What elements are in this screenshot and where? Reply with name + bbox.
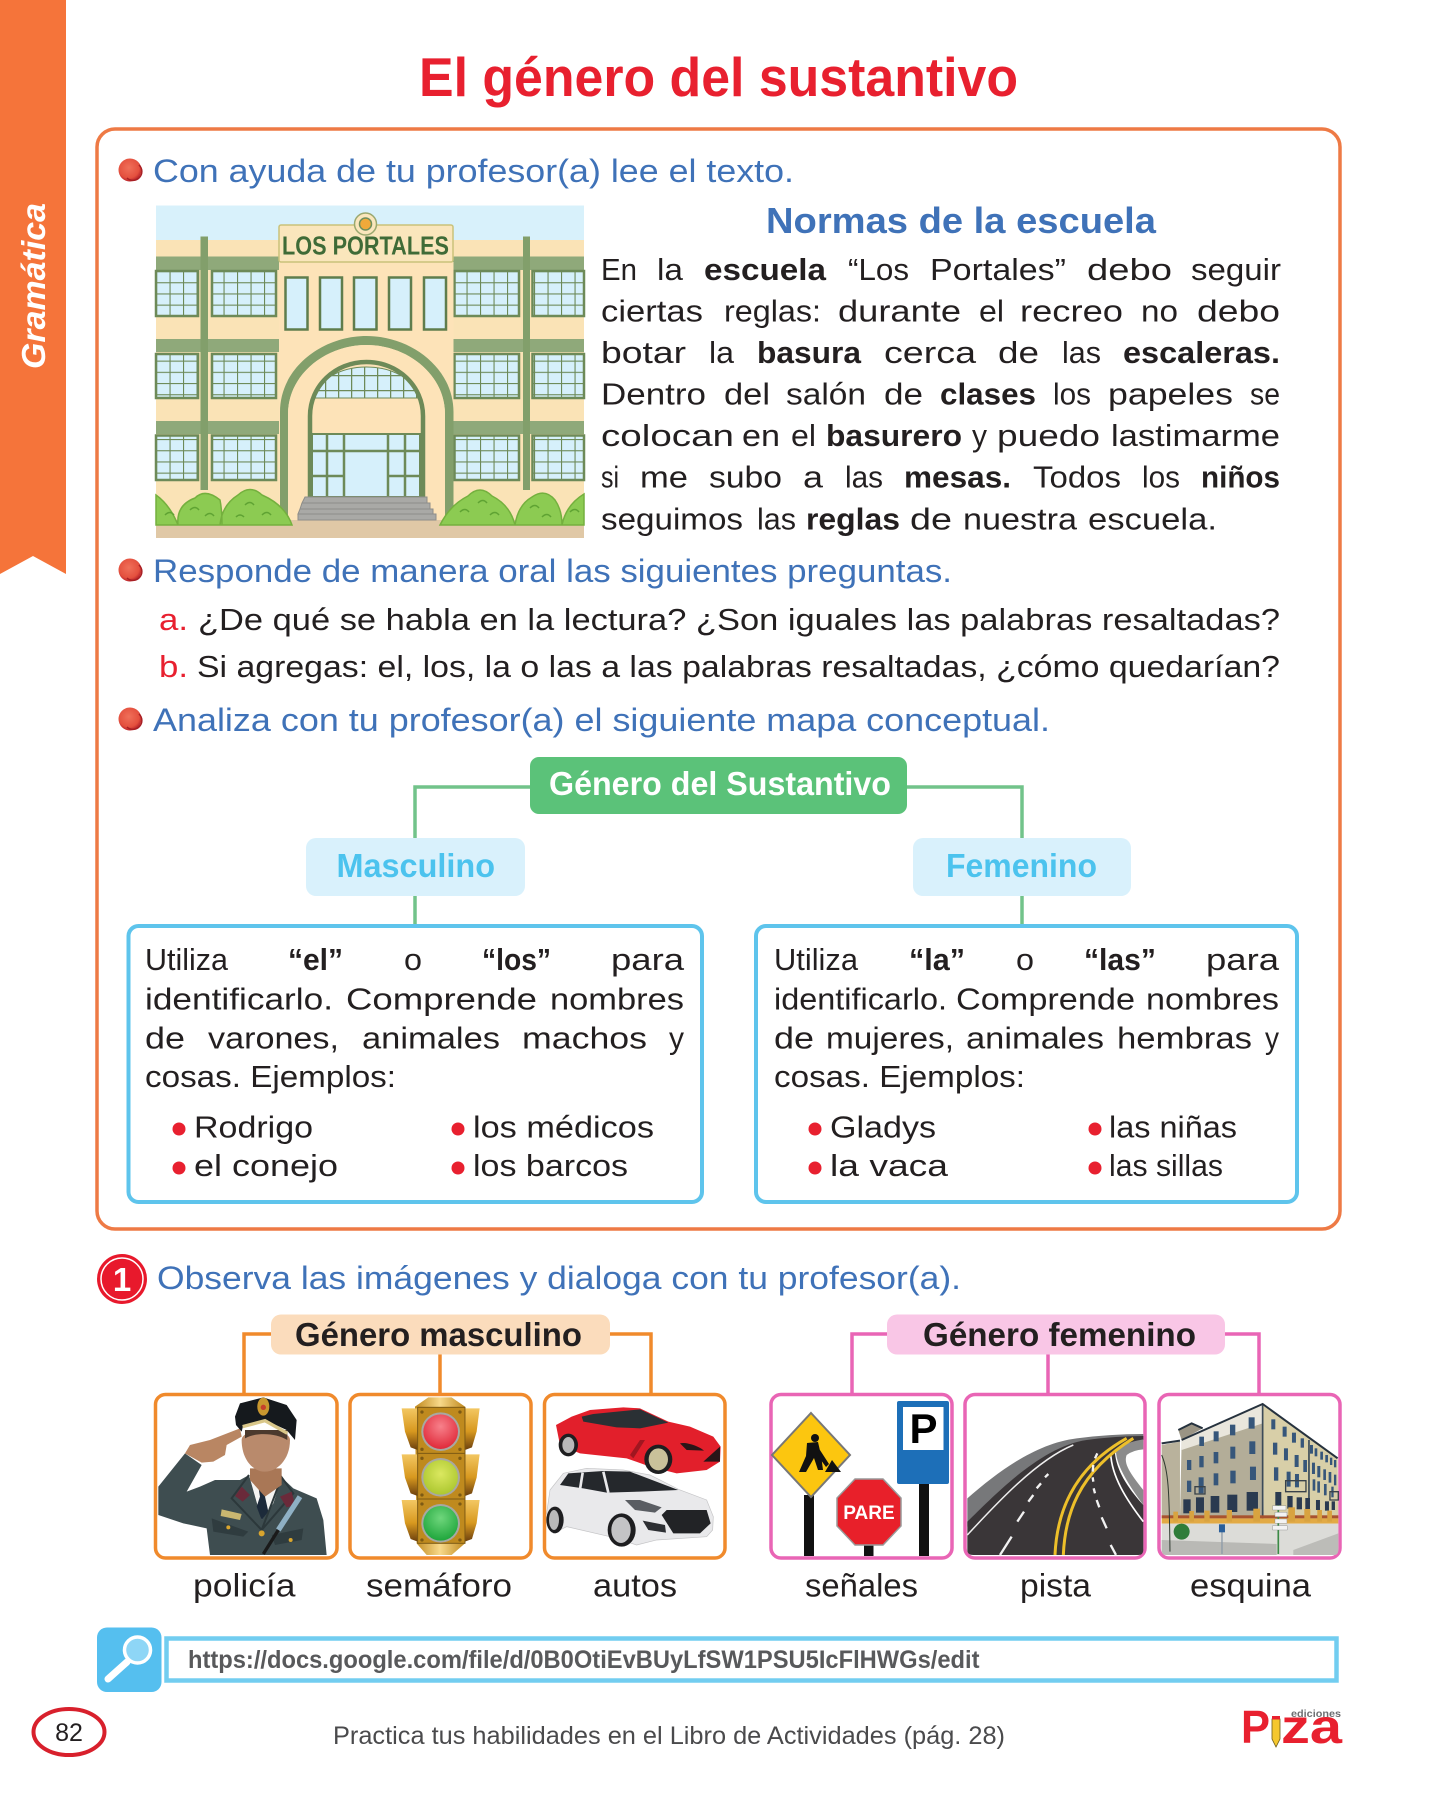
- feminine box: mujeres,: [826, 1020, 954, 1056]
- masculine box: varones,: [208, 1020, 339, 1056]
- feminine box: Comprende: [956, 982, 1135, 1016]
- feminine box: [756, 926, 1297, 1202]
- instruction 3: Analiza con tu profesor(a) el siguiente mapa conceptual.: [153, 702, 1050, 738]
- card: autos: [544, 1394, 725, 1558]
- reading text: Dentro: [601, 376, 706, 411]
- reading text: “Los: [848, 252, 909, 287]
- masculine box: cosas. Ejemplos:: [145, 1059, 396, 1094]
- concept: masculino: Masculino: [336, 847, 495, 884]
- feminine box: cosas. Ejemplos:: [774, 1059, 1025, 1094]
- feminine examples: las niñas: [1109, 1110, 1237, 1145]
- reading text: seguimos: [601, 501, 743, 536]
- reading text: clases: [940, 376, 1036, 411]
- logo: Piza ediciones: P: [1241, 1701, 1270, 1753]
- reading text: y: [972, 418, 987, 453]
- exercise instruction: Observa las imágenes y dialoga con tu profesor(a).: [157, 1260, 961, 1296]
- heading: género masculino: Género masculino: [295, 1316, 582, 1353]
- masculine box: identificarlo.: [145, 982, 333, 1016]
- card: señales: [771, 1394, 952, 1558]
- sidebar ribbon: [0, 0, 66, 574]
- group: género femenino: [771, 1314, 1340, 1604]
- masculine box: machos: [522, 1020, 647, 1056]
- masculine box: y: [669, 1020, 684, 1056]
- masculine box: “los”: [482, 942, 551, 977]
- reading text: del: [724, 376, 770, 411]
- sidebar label: Gramática: [15, 203, 52, 369]
- group: género masculino: [156, 1314, 725, 1604]
- label: semáforo: semáforo: [366, 1568, 512, 1604]
- bullet 1: [118, 158, 142, 182]
- logo: Piza ediciones: za: [1281, 1701, 1342, 1754]
- reading text: escuela: [704, 252, 827, 287]
- feminine box: “la”: [909, 942, 965, 977]
- feminine box: nombres: [1146, 982, 1279, 1016]
- reading text: el: [979, 293, 1004, 328]
- bullet 3: [118, 708, 142, 730]
- reading text: de: [910, 501, 952, 536]
- logo: Piza ediciones: [1241, 1701, 1342, 1754]
- reading text: puedo: [997, 418, 1100, 453]
- label: autos: autos: [593, 1568, 677, 1604]
- feminine box: y: [1265, 1020, 1279, 1056]
- masculine box: de: [145, 1020, 185, 1056]
- reading text: Portales”: [930, 252, 1066, 287]
- card: policía: [156, 1394, 337, 1558]
- reading text: en: [742, 418, 780, 453]
- reading text: basurero: [826, 418, 962, 453]
- masculine examples: el conejo: [194, 1148, 338, 1183]
- question a: a.: [159, 602, 188, 637]
- instruction 1: Con ayuda de tu profesor(a) lee el texto.: [153, 153, 794, 189]
- label: señales: señales: [805, 1568, 918, 1604]
- school illustration: LOS PORTALES: [282, 230, 449, 260]
- sign: obras: [772, 1413, 850, 1556]
- reading text: subo: [709, 459, 782, 494]
- concept: femenino: Femenino: [946, 847, 1097, 884]
- reading text: se: [1250, 376, 1280, 411]
- sign: pare: PARE: [843, 1503, 895, 1524]
- masculine box: nombres: [550, 982, 684, 1016]
- concept root: [530, 757, 907, 814]
- reading text: basura: [757, 335, 862, 370]
- white car: [546, 1468, 713, 1547]
- feminine box: identificarlo.: [774, 982, 947, 1016]
- instruction 2: Responde de manera oral las siguientes preguntas.: [153, 553, 952, 589]
- reading text: debo: [1087, 252, 1172, 287]
- masculine box: para: [611, 942, 685, 977]
- sign board: [279, 225, 453, 262]
- title: El género del sustantivo: [419, 46, 1018, 108]
- panel: main reading: [97, 129, 1340, 1229]
- masculine examples: Rodrigo: [194, 1110, 313, 1145]
- reading text: de: [998, 335, 1039, 370]
- reading text: botar: [601, 335, 686, 370]
- reading text: la: [657, 252, 684, 287]
- reading text: las: [757, 501, 796, 536]
- reading text: escuela.: [1088, 501, 1217, 536]
- page number: [34, 1709, 104, 1755]
- reading text: los: [1142, 459, 1180, 494]
- heading: género femenino: Género femenino: [923, 1316, 1196, 1353]
- card: esquina: [1159, 1394, 1340, 1558]
- sign: parking: [897, 1401, 949, 1556]
- reading text: la: [709, 335, 735, 370]
- exercise number 1: [97, 1254, 147, 1304]
- reading text: de: [884, 376, 923, 411]
- feminine box: de: [774, 1020, 814, 1056]
- reading text: colocan: [601, 418, 734, 453]
- masculine examples: [172, 1110, 654, 1183]
- sign: pare: [837, 1479, 901, 1556]
- label: esquina: esquina: [1190, 1568, 1311, 1604]
- question b: b.: [159, 649, 188, 684]
- school illustration: [156, 206, 584, 538]
- question a: ¿De qué se habla en la lectura? ¿Son iguales las palabras resaltadas?: [198, 602, 1280, 637]
- reading text: a: [803, 459, 824, 494]
- reading text: el: [791, 418, 816, 453]
- reading text: nuestra: [963, 501, 1078, 536]
- link bar: [166, 1638, 1336, 1680]
- reading text: si: [601, 459, 619, 494]
- page number: 82: [55, 1719, 83, 1747]
- reading text: mesas.: [904, 459, 1011, 494]
- logo: Piza ediciones: ediciones: [1291, 1708, 1341, 1720]
- reading text: lastimarme: [1111, 418, 1280, 453]
- reading text: Todos: [1033, 459, 1121, 494]
- feminine box: hembras: [1117, 1020, 1252, 1056]
- reading text: cerca: [884, 335, 977, 370]
- feminine box: “las”: [1084, 942, 1156, 977]
- feminine box: o: [1016, 942, 1034, 977]
- label: policía: policía: [193, 1568, 296, 1604]
- feminine box: Utiliza: [774, 942, 859, 977]
- reading text: papeles: [1108, 376, 1233, 411]
- reading text: En: [601, 252, 637, 287]
- feminine box: animales: [966, 1020, 1104, 1056]
- reading text: niños: [1201, 459, 1280, 494]
- reading text: recreo: [1020, 293, 1123, 328]
- masculine box: Comprende: [346, 982, 537, 1016]
- concept map: [128, 757, 1297, 1202]
- reading text: las: [845, 459, 883, 494]
- masculine box: “el”: [288, 942, 343, 977]
- red car: [556, 1407, 721, 1474]
- masculine box: [128, 926, 702, 1202]
- feminine examples: la vaca: [830, 1148, 949, 1183]
- concept root: Género del Sustantivo: [549, 765, 891, 802]
- label: pista: pista: [1020, 1568, 1091, 1604]
- reading text: me: [640, 459, 688, 494]
- reading text: debo: [1197, 293, 1280, 328]
- masculine examples: los barcos: [473, 1148, 628, 1183]
- feminine box: para: [1206, 942, 1280, 977]
- bullet 2: [118, 558, 142, 582]
- feminine examples: Gladys: [830, 1110, 936, 1145]
- masculine box: animales: [362, 1020, 500, 1056]
- sign: parking: P: [909, 1405, 938, 1452]
- reading heading: Normas de la escuela: [766, 200, 1157, 241]
- link bar: https://docs.google.com/file/d/0B0OtiEvBUyLfSW1PSU5IcFlHWGs/edit: [188, 1646, 980, 1674]
- reading text: escaleras.: [1123, 335, 1280, 370]
- feminine examples: las sillas: [1109, 1148, 1223, 1183]
- bushes: [156, 490, 584, 525]
- masculine box: o: [404, 942, 422, 977]
- reading text: reglas: [806, 501, 900, 536]
- reading text: salón: [786, 376, 866, 411]
- crest: [354, 213, 376, 235]
- reading text: los: [1053, 376, 1091, 411]
- reading text: no: [1141, 293, 1178, 328]
- card: pista: [965, 1394, 1145, 1558]
- concept: femenino: [913, 838, 1131, 896]
- icon: magnifier: [97, 1628, 162, 1692]
- reading text: durante: [838, 293, 961, 328]
- reading text: ciertas: [601, 293, 703, 328]
- exercise number 1: 1: [113, 1261, 131, 1298]
- footer note: Practica tus habilidades en el Libro de Actividades (pág. 28): [333, 1722, 1005, 1750]
- card: semáforo: [350, 1394, 531, 1558]
- reading text: las: [1062, 335, 1101, 370]
- reading text: [601, 252, 1281, 536]
- masculine box: Utiliza: [145, 942, 229, 977]
- reading text: seguir: [1191, 252, 1281, 287]
- masculine examples: los médicos: [473, 1110, 654, 1145]
- feminine examples: [808, 1110, 1237, 1183]
- question b: Si agregas: el, los, la o las a las palabras resaltadas, ¿cómo quedarían?: [197, 649, 1280, 684]
- reading text: reglas:: [724, 293, 821, 328]
- concept: masculino: [306, 838, 525, 896]
